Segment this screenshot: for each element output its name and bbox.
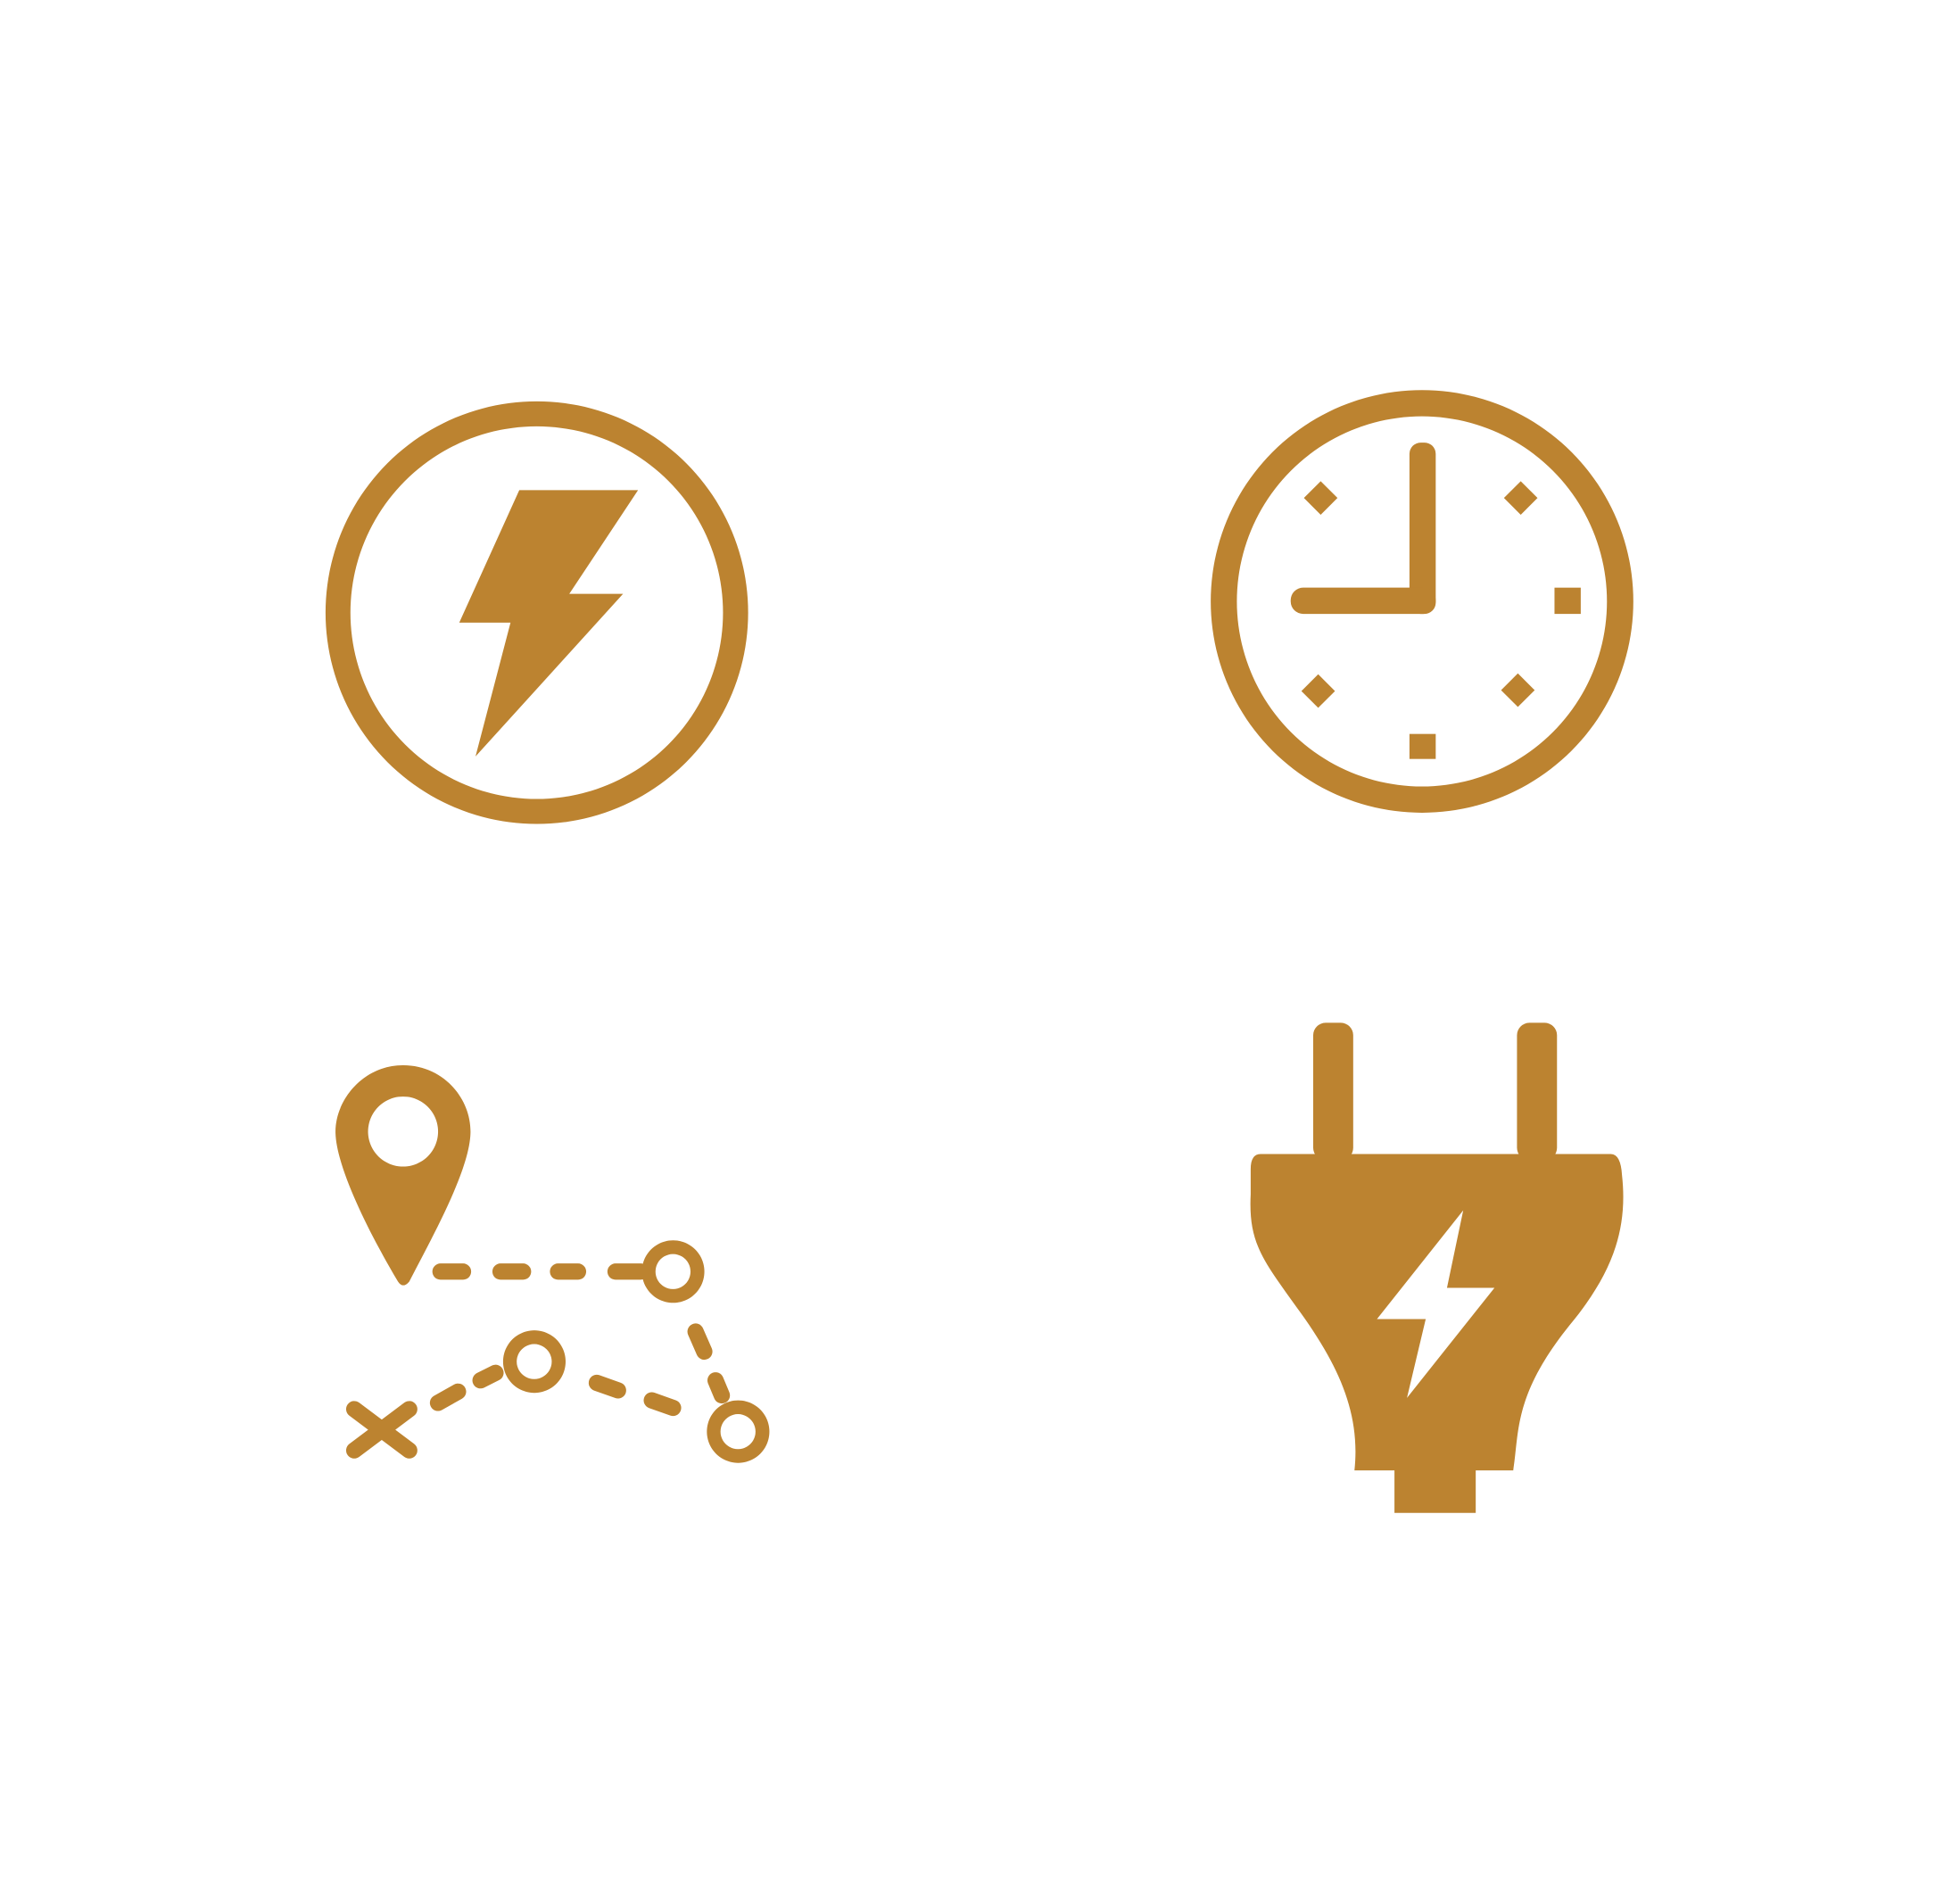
icon: map route — [335, 1065, 769, 1463]
icon: plug — [1251, 1022, 1624, 1513]
icon: clock — [1211, 390, 1633, 813]
icon: lightning in circle — [326, 401, 748, 824]
